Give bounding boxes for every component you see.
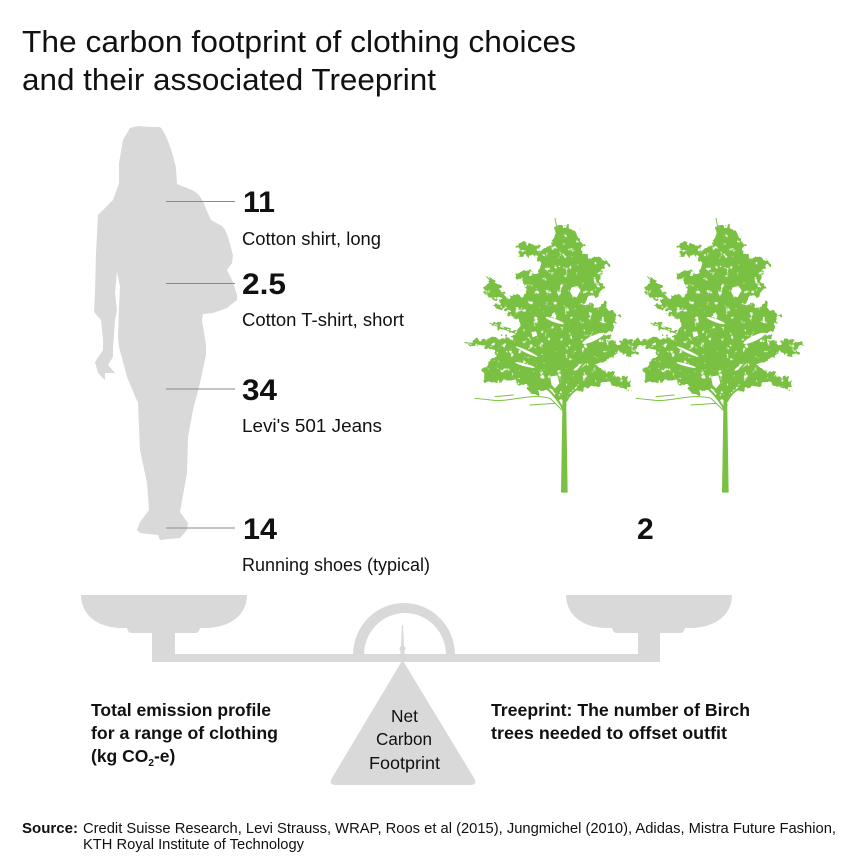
item: Levi's 501 jeans: Levi's 501 Jeans <box>242 416 382 436</box>
source: Credit Suisse Research, Levi Strauss, WRAP, Roos et al (2015), Jungmichel (2010), Adidas, Mistra Future Fashion, <box>83 820 836 837</box>
item: running shoes <box>166 513 430 575</box>
item: cotton shirt, long <box>166 186 381 249</box>
source: KTH Royal Institute of Technology <box>83 836 304 853</box>
fulcrum label: Carbon <box>376 729 432 749</box>
needle <box>400 625 406 655</box>
fulcrum label <box>369 706 440 773</box>
right pan <box>566 595 732 656</box>
beam <box>152 654 660 662</box>
item: cotton shirt, long: Cotton shirt, long <box>242 229 381 249</box>
title: and their associated Treeprint <box>22 62 436 97</box>
dial arc <box>353 603 455 655</box>
title <box>22 24 576 97</box>
item: cotton t-shirt, short <box>166 268 404 330</box>
left caption: for a range of clothing <box>91 723 278 743</box>
source <box>22 820 836 853</box>
item: Levi's 501 jeans: 34 <box>242 374 277 407</box>
icon: birch tree left <box>465 218 643 493</box>
right caption <box>491 700 750 743</box>
fulcrum label: Footprint <box>369 753 440 773</box>
item: cotton t-shirt, short: 2.5 <box>242 268 286 301</box>
item: Levi's 501 jeans <box>166 374 382 436</box>
fulcrum triangle <box>331 660 475 785</box>
left caption: 2 <box>148 758 154 769</box>
item: cotton t-shirt, short: Cotton T-shirt, short <box>242 310 404 330</box>
left pan <box>81 595 247 656</box>
left caption <box>91 700 278 769</box>
icon: woman silhouette <box>94 126 237 540</box>
item: cotton shirt, long: 11 <box>243 186 275 219</box>
fulcrum label: Net <box>391 706 418 726</box>
source: Source: <box>22 820 78 837</box>
right caption: Treeprint: The number of Birch <box>491 700 750 720</box>
left caption: -e) <box>154 746 175 766</box>
balance scale <box>81 595 732 785</box>
left caption: (kg CO <box>91 746 148 766</box>
item: running shoes: 14 <box>243 513 277 546</box>
item: running shoes: Running shoes (typical) <box>242 555 430 575</box>
treeprint number: 2 <box>637 513 654 546</box>
title: The carbon footprint of clothing choices <box>22 24 576 59</box>
left caption: Total emission profile <box>91 700 271 720</box>
right caption: trees needed to offset outfit <box>491 723 727 743</box>
icon: birch tree right <box>626 218 804 493</box>
